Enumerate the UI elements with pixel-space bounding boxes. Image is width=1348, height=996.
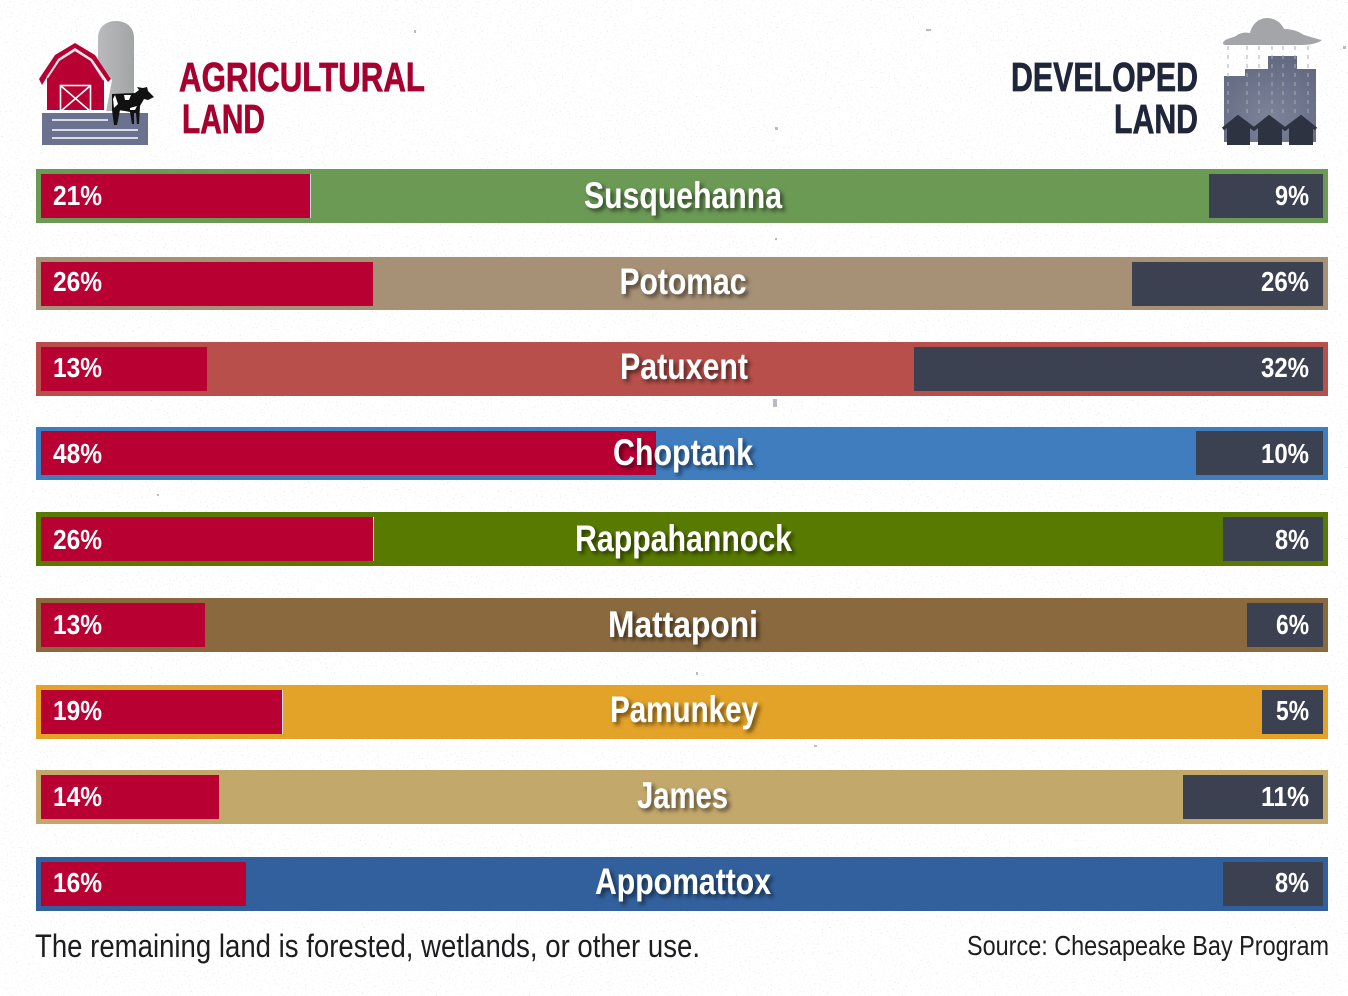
buildings (1224, 56, 1316, 142)
row: Rappahannock (36, 512, 1328, 566)
row: Patuxent: Patuxent (620, 346, 748, 387)
row: Choptank (36, 427, 1328, 480)
row: Susquehanna: Susquehanna (584, 175, 782, 216)
rain (1228, 46, 1308, 116)
row: Mattaponi: 13% (53, 609, 102, 640)
row: Choptank: 10% (1261, 438, 1309, 469)
icon: barn, silo and cow (39, 21, 154, 145)
row: Patuxent (36, 342, 1328, 396)
footnote: The remaining land is forested, wetlands, or other use. (35, 928, 700, 964)
barn halo (39, 43, 112, 112)
row: Appomattox: 8% (1275, 867, 1309, 898)
barn door (60, 86, 90, 111)
row: Mattaponi: 6% (1276, 609, 1309, 640)
row: Potomac (36, 257, 1328, 310)
row: James: 11% (1261, 781, 1309, 812)
heading: agricultural land (179, 54, 425, 142)
heading: developed land (1011, 54, 1198, 142)
row: Appomattox: Appomattox (595, 861, 771, 902)
heading: agricultural land: AGRICULTURAL (179, 54, 425, 100)
row: Appomattox (36, 857, 1328, 911)
field furrows (52, 120, 138, 138)
row: Pamunkey (36, 685, 1328, 739)
row: Potomac: 26% (53, 266, 102, 297)
row: Potomac: 26% (1261, 266, 1309, 297)
silo (98, 21, 134, 111)
houses (1223, 117, 1316, 145)
row: James (36, 770, 1328, 824)
heading: developed land: LAND (1114, 96, 1198, 142)
row: Pamunkey: 5% (1276, 695, 1309, 726)
barn roof highlight (47, 50, 104, 80)
row: James: James (637, 775, 728, 816)
row: Choptank: 48% (53, 438, 102, 469)
row: Rappahannock: 8% (1275, 524, 1309, 555)
barn roof (39, 43, 111, 85)
barn building (47, 50, 104, 110)
row: Choptank: Choptank (613, 432, 753, 473)
row: Susquehanna (36, 169, 1328, 223)
row: Susquehanna: 9% (1275, 180, 1309, 211)
row: Appomattox: 16% (53, 867, 102, 898)
cloud (1223, 18, 1322, 45)
row: Potomac: Potomac (620, 261, 746, 302)
row: Susquehanna: 21% (53, 180, 102, 211)
row: Mattaponi (36, 598, 1328, 652)
heading: developed land: DEVELOPED (1011, 54, 1198, 100)
row: Pamunkey: Pamunkey (610, 689, 758, 730)
row: Patuxent: 13% (53, 352, 102, 383)
row: Mattaponi: Mattaponi (608, 604, 758, 645)
row: Rappahannock: Rappahannock (575, 518, 792, 559)
row: Pamunkey: 19% (53, 695, 102, 726)
row: James: 14% (53, 781, 102, 812)
heading: agricultural land: LAND (182, 96, 265, 142)
row: Rappahannock: 26% (53, 524, 102, 555)
field (42, 113, 148, 145)
row: Patuxent: 32% (1261, 352, 1309, 383)
cow (112, 87, 154, 125)
icon: city with rain cloud (1223, 18, 1322, 145)
